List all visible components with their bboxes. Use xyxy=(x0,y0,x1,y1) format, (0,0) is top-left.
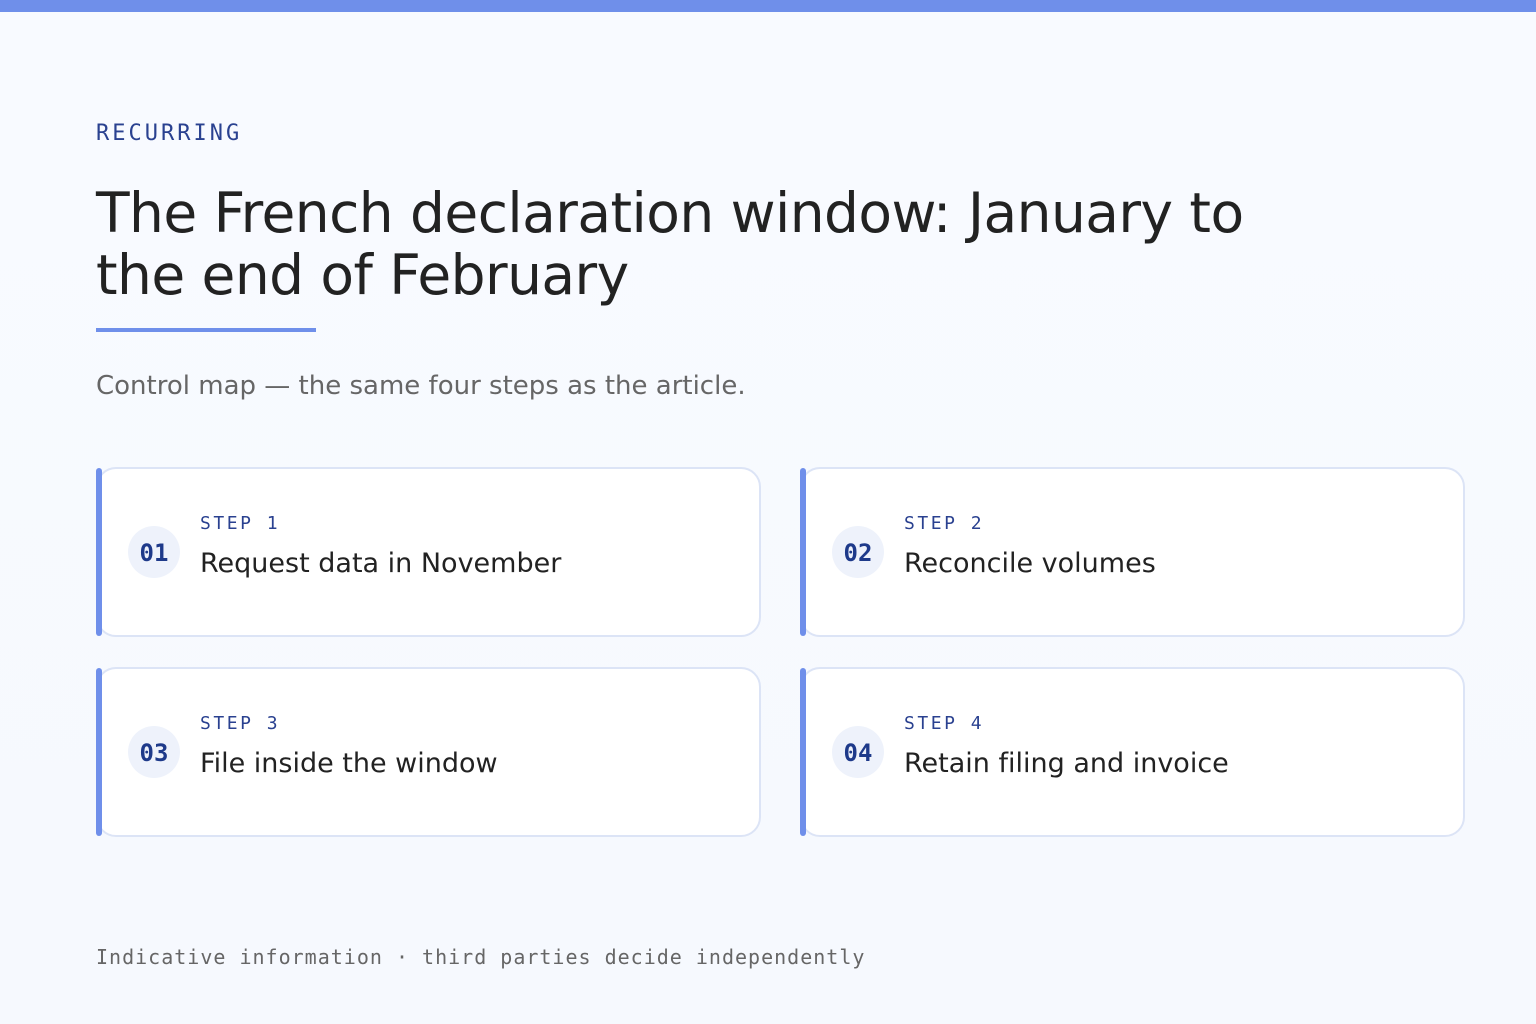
step 1 text: Request data in November xyxy=(200,548,561,579)
footer note: Indicative information · third parties decide independently xyxy=(96,945,865,969)
panel: step 2 xyxy=(800,467,1465,637)
subtitle: Control map — the same four steps as the article. xyxy=(96,371,746,401)
step 4 number badge: 04 xyxy=(844,739,872,767)
step 2 number badge xyxy=(832,526,884,578)
step 3 text: File inside the window xyxy=(200,748,498,779)
step 4 number badge xyxy=(832,726,884,778)
panel: step 3 xyxy=(96,667,761,837)
step 3 label: STEP 3 xyxy=(200,713,280,734)
step 1 number badge: 01 xyxy=(140,539,168,567)
step 4 label: STEP 4 xyxy=(904,713,984,734)
title: The French declaration window: January to xyxy=(96,181,1244,245)
top accent band xyxy=(0,0,1536,12)
step 2 text: Reconcile volumes xyxy=(904,548,1156,579)
step 4 text: Retain filing and invoice xyxy=(904,748,1229,779)
eyebrow label: RECURRING xyxy=(96,121,242,146)
step 2 number badge: 02 xyxy=(844,539,872,567)
step 3 number badge: 03 xyxy=(140,739,168,767)
step 2 label: STEP 2 xyxy=(904,513,984,534)
title underline xyxy=(96,328,316,332)
panel: step 4 xyxy=(800,667,1465,837)
title: the end of February xyxy=(96,243,629,307)
title xyxy=(96,181,1244,307)
step 3 number badge xyxy=(128,726,180,778)
step 1 number badge xyxy=(128,526,180,578)
step 1 label: STEP 1 xyxy=(200,513,280,534)
panel: step 1 xyxy=(96,467,761,637)
